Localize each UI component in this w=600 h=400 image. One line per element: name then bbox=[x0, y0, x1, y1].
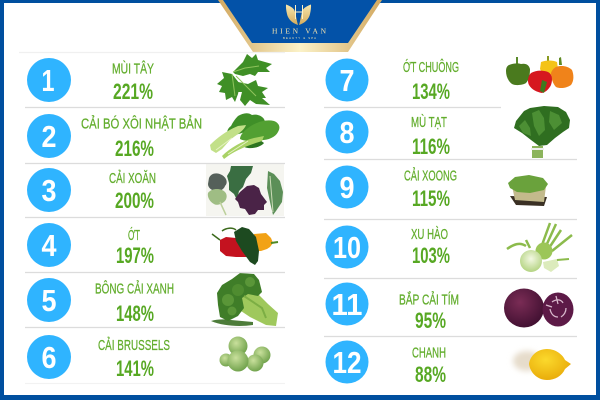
number badge 11: 11 bbox=[332, 287, 362, 322]
icon: watercress bbox=[508, 175, 548, 206]
row 12: lemon bbox=[326, 340, 571, 387]
row 6: brussels sprouts bbox=[27, 335, 270, 381]
brand tagline: BEAUTY & SPA bbox=[283, 36, 316, 40]
number badge 12: 12 bbox=[332, 345, 362, 380]
number badge 6 bbox=[27, 335, 71, 379]
row 4: chili peppers bbox=[27, 223, 278, 268]
number badge 1: 1 bbox=[42, 63, 54, 98]
row 7: bell peppers bbox=[326, 56, 573, 104]
value: 141% bbox=[116, 356, 154, 381]
row 10: kohlrabi bbox=[326, 223, 572, 272]
left column bbox=[27, 54, 284, 381]
value: 103% bbox=[412, 243, 450, 268]
number badge 2: 2 bbox=[42, 119, 56, 154]
number badge 8 bbox=[326, 110, 368, 154]
icon: kale bbox=[206, 164, 284, 216]
icon: mustard greens bbox=[514, 106, 570, 158]
number badge 5: 5 bbox=[42, 283, 56, 318]
label: XU HÀO bbox=[411, 226, 448, 243]
logo monogram bbox=[286, 4, 311, 25]
value: 197% bbox=[116, 243, 154, 268]
number badge 7 bbox=[326, 58, 368, 102]
number badge 3: 3 bbox=[42, 173, 56, 208]
icon: red cabbage bbox=[504, 288, 574, 328]
number badge 11 bbox=[326, 282, 368, 326]
label: BẮP CẢI TÍM bbox=[399, 290, 459, 308]
row 11: red cabbage bbox=[326, 282, 574, 333]
number badge 9: 9 bbox=[340, 170, 354, 205]
number badge 2 bbox=[27, 114, 71, 158]
icon: kohlrabi bbox=[507, 223, 572, 272]
value: 115% bbox=[412, 186, 450, 211]
value: 148% bbox=[116, 301, 154, 326]
label: MÙI TÂY bbox=[112, 60, 154, 78]
number badge 4: 4 bbox=[42, 228, 57, 263]
icon: bok choy bbox=[210, 113, 279, 159]
value: 200% bbox=[115, 188, 154, 213]
value: 221% bbox=[113, 79, 153, 104]
row 2: bok choy bbox=[27, 113, 279, 161]
value: 216% bbox=[115, 136, 154, 161]
row 5: broccoli bbox=[27, 273, 278, 326]
number badge 3 bbox=[27, 168, 71, 212]
icon: bell peppers bbox=[506, 56, 573, 93]
value: 95% bbox=[415, 308, 446, 333]
number badge 5 bbox=[27, 278, 71, 322]
number badge 6: 6 bbox=[42, 340, 56, 375]
label: CẢI XOONG bbox=[404, 168, 457, 184]
value: 134% bbox=[412, 79, 450, 104]
right column bbox=[326, 56, 574, 387]
icon: parsley bbox=[217, 54, 272, 106]
row 9: watercress bbox=[326, 166, 548, 211]
row dividers bbox=[19, 52, 577, 384]
label: BÔNG CẢI XANH bbox=[95, 280, 174, 298]
number badge 7: 7 bbox=[340, 63, 354, 98]
value: 88% bbox=[415, 362, 446, 387]
label: CẢI XOĂN bbox=[109, 170, 156, 187]
label: ỚT CHUÔNG bbox=[403, 59, 459, 76]
icon: brussels sprouts bbox=[220, 336, 270, 372]
row 3: kale bbox=[27, 164, 284, 216]
logo badge bbox=[218, 0, 382, 52]
icon: chili peppers bbox=[212, 227, 278, 265]
label: CHANH bbox=[412, 346, 446, 362]
icon: lemon bbox=[513, 349, 571, 380]
number badge 8: 8 bbox=[340, 115, 354, 150]
label: CẢI BÓ XÔI NHẬT BẢN bbox=[81, 116, 202, 132]
number badge 4 bbox=[27, 223, 71, 267]
number badge 10 bbox=[326, 226, 368, 268]
row 1: parsley bbox=[27, 54, 272, 106]
row 8: mustard greens bbox=[326, 106, 570, 159]
number badge 9 bbox=[326, 166, 368, 208]
label: MÙ TẠT bbox=[411, 114, 447, 131]
number badge 12 bbox=[326, 340, 368, 384]
icon: broccoli bbox=[211, 273, 278, 326]
label: CẢI BRUSSELS bbox=[98, 337, 170, 354]
label: ỚT bbox=[128, 227, 140, 244]
number badge 1 bbox=[27, 58, 71, 102]
brand name: HIEN VAN bbox=[272, 26, 327, 36]
number badge 10: 10 bbox=[333, 230, 361, 265]
value: 116% bbox=[412, 134, 450, 159]
